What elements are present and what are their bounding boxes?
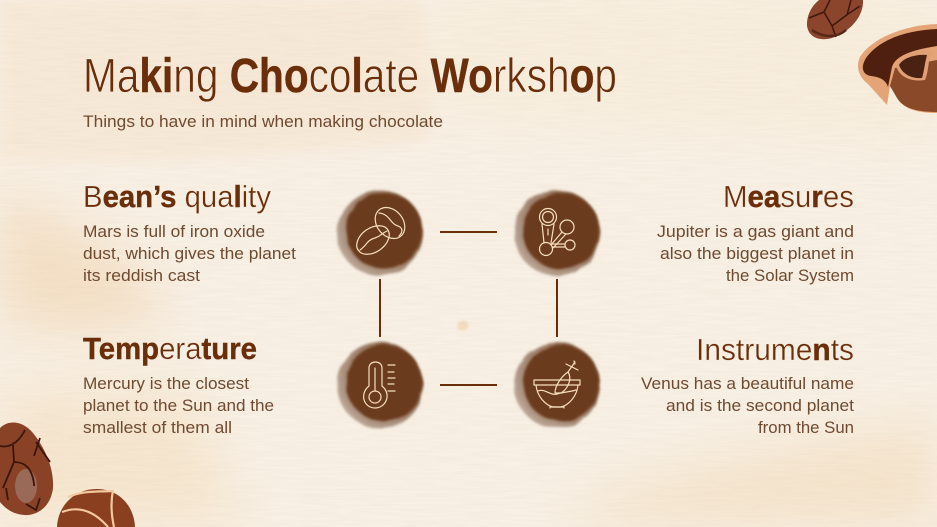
text: measures description: the Solar System	[726, 266, 854, 285]
text: bean's quality description: its reddish cast	[83, 266, 200, 285]
heading: measures: Measures	[723, 179, 854, 214]
icon: bowl and whisk	[514, 342, 600, 428]
subtitle: Things to have in mind when making chocolate	[83, 112, 443, 131]
text: temperature description: Mercury is the closest	[83, 374, 249, 393]
text: temperature description: planet to the Sun and the	[83, 396, 274, 415]
heading: instruments: Instruments	[696, 332, 854, 367]
text: measures description: also the biggest planet in	[660, 244, 854, 263]
icon: thermometer	[337, 342, 423, 428]
panel: instruments	[641, 332, 854, 437]
icon: measuring spoons	[514, 190, 600, 276]
decoration: bottom cocoa bean	[57, 489, 135, 527]
title: Making Chocolate Workshop	[83, 50, 617, 103]
text: temperature description: smallest of them all	[83, 418, 232, 437]
connector: right	[556, 279, 558, 337]
text: instruments description: from the Sun	[758, 418, 854, 437]
icon: coffee bean	[337, 190, 423, 276]
decoration: bottom-left cocoa bean	[0, 423, 53, 515]
text: measures description: Jupiter is a gas giant and	[657, 222, 854, 241]
heading: temperature: Temperature	[83, 331, 257, 366]
text: bean's quality description: dust, which gives the planet	[83, 244, 296, 263]
decoration: top-right chocolate curl	[858, 24, 937, 113]
text: bean's quality description: Mars is full of iron oxide	[83, 222, 265, 241]
text: temperature description	[83, 374, 274, 437]
connector: left	[379, 279, 381, 337]
panel: bean's quality	[83, 179, 296, 285]
text: bean's quality description	[83, 222, 296, 285]
connector: bottom	[440, 384, 497, 386]
text: instruments description: Venus has a beautiful name	[641, 374, 854, 393]
text: instruments description: and is the second planet	[666, 396, 854, 415]
panel: measures	[657, 179, 854, 285]
panel: temperature	[83, 331, 274, 437]
text: measures description	[657, 222, 854, 285]
text: instruments description	[641, 374, 854, 437]
heading: bean's quality: Bean’s quality	[83, 179, 271, 214]
connector: top	[440, 231, 497, 233]
decoration: top-right cocoa bean	[807, 0, 863, 39]
